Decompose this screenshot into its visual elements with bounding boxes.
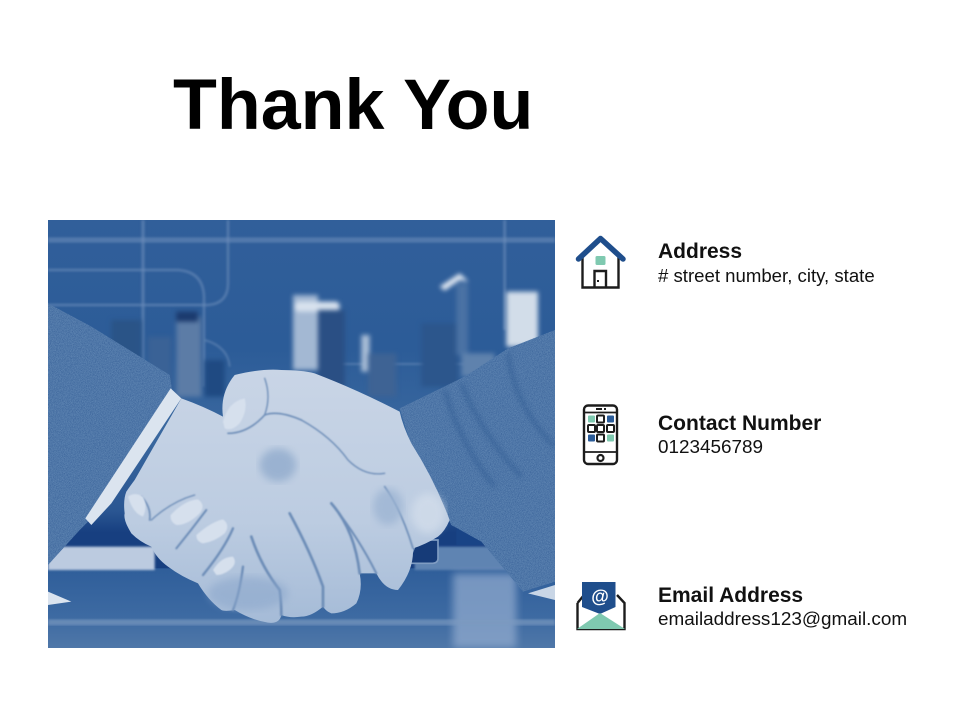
house roof xyxy=(578,238,623,259)
green envelope flap xyxy=(577,613,625,629)
text block: email address xyxy=(658,584,907,630)
app tiles xyxy=(588,416,614,442)
text block: address: Address xyxy=(658,240,742,263)
text block: contact number xyxy=(658,412,821,458)
house walls xyxy=(582,257,618,288)
finger nails xyxy=(128,398,246,575)
table gadget behind hands xyxy=(408,540,438,563)
text block: email address: emailaddress123@gmail.com xyxy=(658,609,907,630)
icon: email envelope xyxy=(576,582,626,630)
knuckle shadows xyxy=(141,378,413,615)
palm shading xyxy=(260,448,296,482)
city skyline xyxy=(111,273,538,397)
phone body xyxy=(584,406,617,464)
icon: house xyxy=(576,236,626,289)
text block: contact number: 0123456789 xyxy=(658,437,763,458)
text block: address: # street number, city, state xyxy=(658,265,875,286)
background grid lines xyxy=(48,220,555,387)
house door xyxy=(594,271,606,288)
hand silhouette xyxy=(124,370,450,623)
right sleeve xyxy=(400,330,555,592)
at sign: @ xyxy=(591,586,609,606)
icon: smartphone xyxy=(582,404,618,466)
house window xyxy=(596,256,606,265)
left sleeve xyxy=(48,303,172,565)
background sky xyxy=(48,220,555,648)
envelope outline xyxy=(578,595,624,629)
photo: handshake over city skyline xyxy=(48,220,555,648)
table and floor xyxy=(48,568,555,648)
blue letter xyxy=(582,582,616,614)
title: Thank You xyxy=(173,65,533,145)
text block: email address: Email Address xyxy=(658,584,803,607)
text block: address xyxy=(658,240,875,286)
handshake xyxy=(124,370,450,623)
text block: contact number: Contact Number xyxy=(658,412,821,435)
left shirt cuff xyxy=(85,388,181,525)
